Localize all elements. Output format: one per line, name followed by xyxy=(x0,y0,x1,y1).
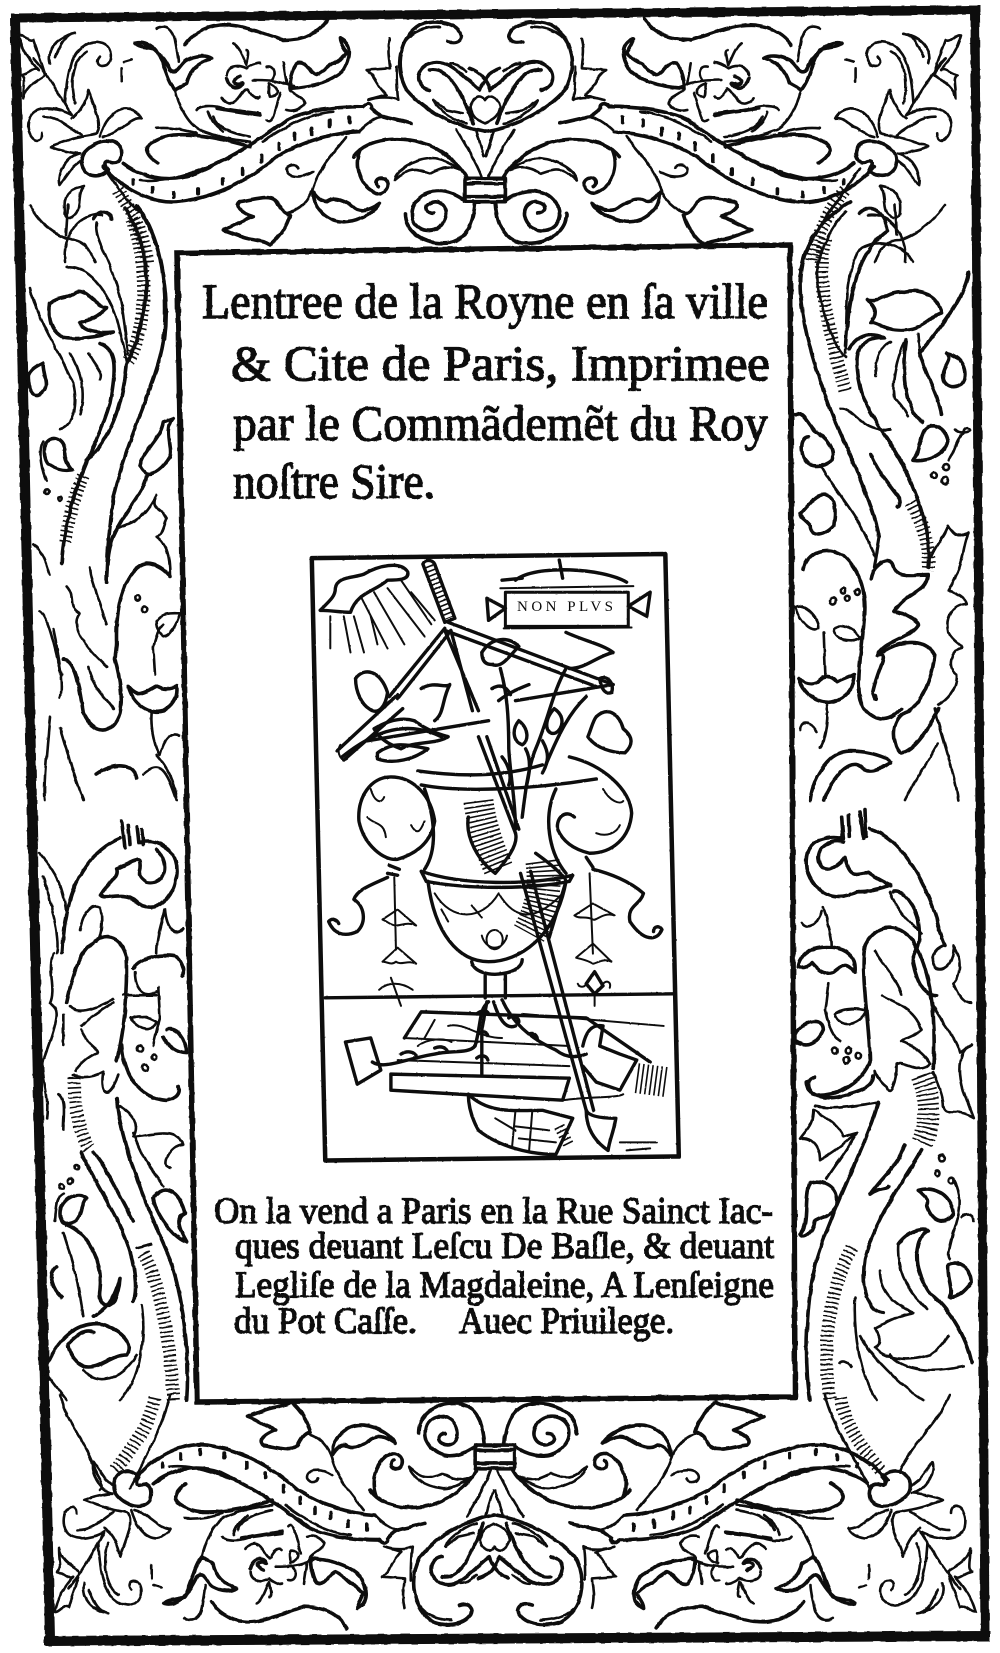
title text: par le Commãdemẽt du Roy xyxy=(233,395,768,451)
vase break hatching xyxy=(468,737,566,938)
title text xyxy=(202,273,770,509)
banner: non plus xyxy=(487,560,650,628)
vase body xyxy=(359,757,632,998)
left column upper foliage xyxy=(28,206,180,800)
top border rule xyxy=(11,10,980,18)
title text: noſtre Sire. xyxy=(233,453,435,509)
right column lower foliage xyxy=(795,810,973,1400)
top ornament left half xyxy=(18,18,500,245)
top ornament right half xyxy=(470,18,961,245)
imprint text: du Pot Caſſe. xyxy=(234,1301,417,1342)
bottom ornament left half xyxy=(54,1402,508,1628)
twisted rope xyxy=(423,560,455,622)
imprint text: On la vend a Paris en la Rue Sainct Iac- xyxy=(214,1191,773,1232)
storm cloud and rain xyxy=(320,565,435,652)
bottom ornament right half xyxy=(478,1402,976,1628)
emblem frame xyxy=(312,554,679,1160)
bottom border rule xyxy=(44,1636,990,1641)
title text: Lentree de la Royne en ſa ville xyxy=(202,273,768,329)
imprint text: ques deuant Leſcu De Baſle, & deuant xyxy=(235,1226,775,1267)
broken set square xyxy=(337,622,613,760)
broken branches and leaves xyxy=(374,632,631,829)
hanging pendants xyxy=(329,857,662,1006)
imprint text xyxy=(214,1191,775,1342)
right column upper foliage xyxy=(795,202,970,800)
staff xyxy=(521,871,616,1150)
emblem woodcut: broken vase xyxy=(312,554,679,1160)
right border rule xyxy=(975,8,985,1640)
corner joints to side columns xyxy=(30,168,950,1490)
title text: & Cite de Paris, Imprimee xyxy=(231,335,770,391)
central text panel xyxy=(177,245,795,1402)
imprint text: Auec Priuilege. xyxy=(459,1301,674,1342)
chained books xyxy=(345,1000,667,1100)
ground line xyxy=(325,994,674,998)
imprint text: Legliſe de la Magdaleine, A Lenſeigne xyxy=(235,1265,774,1306)
banner motto: NON PLVS xyxy=(517,599,613,615)
left border rule xyxy=(15,18,50,1640)
left column lower foliage xyxy=(40,821,187,1400)
broken column bottom xyxy=(468,1094,657,1154)
